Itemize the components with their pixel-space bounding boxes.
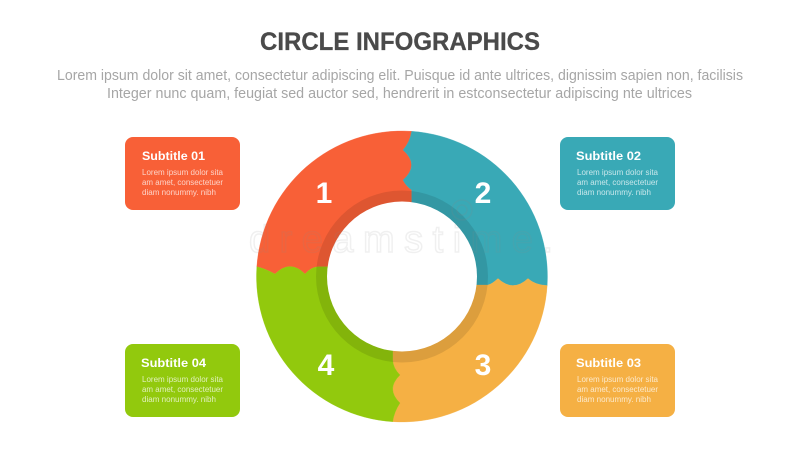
number 4: 4 [318, 349, 335, 382]
watermark: dreamstime. [249, 219, 553, 261]
card: subtitle 01: diam nonummy. nibh [142, 188, 216, 197]
card: subtitle 02: diam nonummy. nibh [577, 188, 651, 197]
card: subtitle 03: diam nonummy. nibh [577, 395, 651, 404]
card: subtitle 04 [125, 344, 240, 417]
card: subtitle 01: am amet, consectetuer [142, 178, 223, 187]
number 3: 3 [475, 349, 491, 382]
watermark [249, 200, 553, 261]
subtitle text: Integer nunc quam, feugiat sed auctor sed, hendrerit in estconsectetur adipiscing nte ultrices [107, 85, 692, 102]
segment 2: teal [402, 131, 547, 286]
number 2: 2 [475, 177, 491, 210]
card: subtitle 04: am amet, consectetuer [142, 385, 223, 394]
card: subtitle 03: Lorem ipsum dolor sita [577, 375, 659, 384]
card: subtitle 04: diam nonummy. nibh [142, 395, 216, 404]
inner shadow ring [316, 190, 488, 362]
card: subtitle 02: Lorem ipsum dolor sita [577, 168, 659, 177]
title: CIRCLE INFOGRAPHICS [260, 28, 540, 56]
number 1: 1 [316, 177, 332, 210]
segment 1: red [257, 131, 412, 276]
card: subtitle 02: Subtitle 02 [576, 151, 641, 163]
card: subtitle 01: Lorem ipsum dolor sita [142, 168, 224, 177]
card: subtitle 02: am amet, consectetuer [577, 178, 658, 187]
card: subtitle 01: Subtitle 01 [142, 151, 206, 163]
card: subtitle 03: am amet, consectetuer [577, 385, 658, 394]
subtitle text: Lorem ipsum dolor sit amet, consectetur adipiscing elit. Puisque id ante ultrices, dignissim sapien non, facilisis [57, 67, 743, 84]
donut chart [256, 131, 547, 422]
card: subtitle 04: Subtitle 04 [141, 358, 207, 370]
card: subtitle 01 [125, 137, 240, 210]
subtitle text [57, 67, 743, 102]
center hole [327, 202, 477, 352]
card: subtitle 03: Subtitle 03 [576, 358, 641, 370]
card: subtitle 04: Lorem ipsum dolor sita [142, 375, 224, 384]
card: subtitle 03 [560, 344, 675, 417]
segment 3: orange [393, 276, 547, 422]
segment 4: green [256, 266, 402, 422]
card: subtitle 02 [560, 137, 675, 210]
